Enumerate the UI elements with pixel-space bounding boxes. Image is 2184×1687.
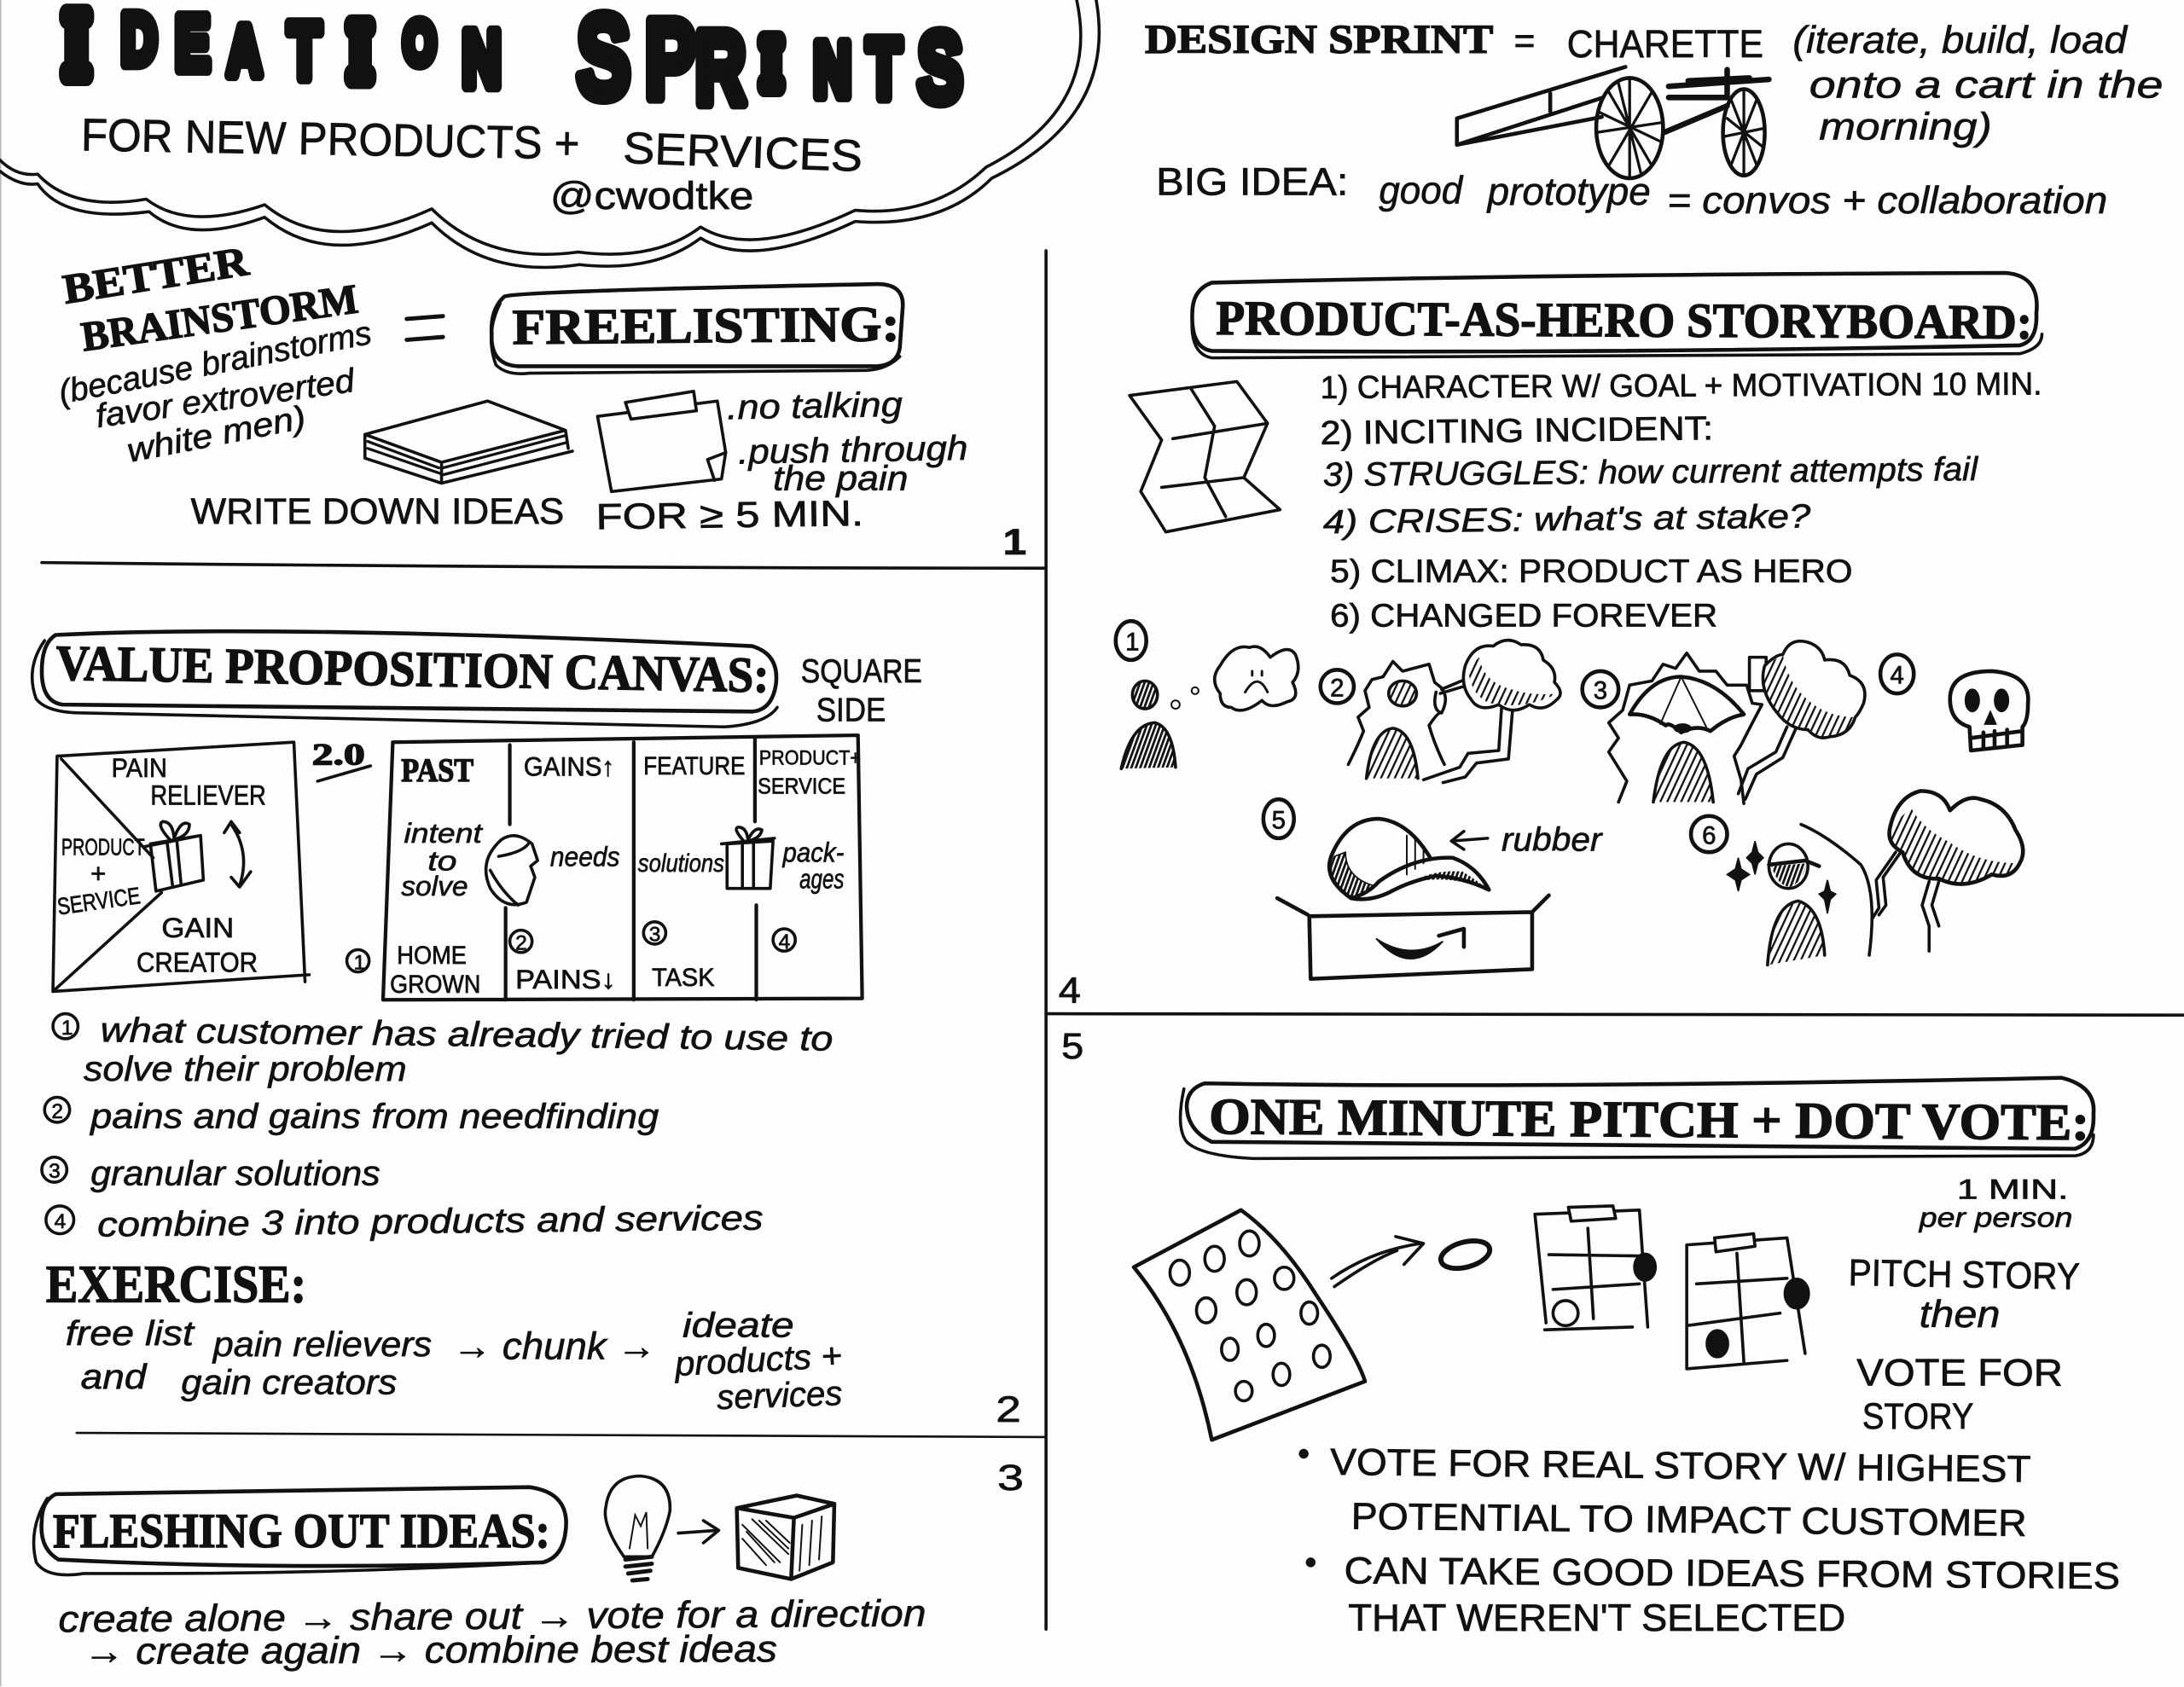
better brainstorm heading: favor extroverted (94, 362, 357, 435)
canvas notes: 2 (51, 1100, 63, 1123)
section numbers: 3 (997, 1458, 1024, 1498)
story panel 5: climax with cap in box (1263, 799, 1549, 979)
title: I (763, 26, 781, 101)
icon: customer head (486, 836, 537, 905)
canvas notes: solve their problem (84, 1049, 407, 1088)
value canvas square: PRODUCT (61, 833, 145, 860)
section numbers: 1 (1003, 522, 1026, 562)
story panel 6: changed forever (1691, 791, 2023, 965)
value canvas 2.0 grid: PAST (401, 752, 473, 789)
header cloud outline (0, 0, 1099, 267)
big idea (1156, 160, 2107, 222)
canvas notes: combine 3 into products and services (97, 1198, 764, 1244)
canvas notes: 4 (55, 1210, 66, 1233)
title: N (814, 27, 851, 113)
write down ideas caption: FOR ≥ 5 MIN. (595, 493, 863, 536)
voting notes: CAN TAKE GOOD IDEAS FROM STORIES (1344, 1550, 2120, 1597)
value canvas 2.0 grid: GAINS↑ (524, 751, 614, 781)
exercise steps: products + (672, 1336, 843, 1383)
icon: second storyboard with votes (1687, 1234, 1809, 1369)
value canvas 2.0 grid: ages (799, 863, 844, 895)
value canvas 2.0 grid: SERVICE (758, 774, 845, 799)
story panel 4: skull (1880, 654, 2028, 751)
value canvas 2.0 grid: to (427, 844, 457, 876)
freelisting tips: the pain (773, 459, 908, 498)
write down ideas caption (191, 491, 863, 536)
title: A (227, 13, 262, 90)
storyboard steps (1320, 366, 2042, 634)
value canvas 2.0 grid: intent (404, 817, 484, 849)
canvas notes (42, 1010, 834, 1244)
value canvas square: + (90, 859, 106, 889)
story panel 2: inciting incident: 2 (1330, 674, 1345, 702)
one minute per person: 1 MIN. (1957, 1174, 2068, 1205)
better brainstorm heading: white men) (124, 399, 309, 470)
freelisting tips: .no talking (727, 385, 903, 426)
value canvas square: SERVICE (55, 882, 142, 920)
value canvas 2.0 grid: GROWN (390, 971, 480, 999)
value canvas 2.0 grid: FEATURE (643, 752, 745, 780)
section numbers: 4 (1059, 971, 1081, 1011)
write down ideas caption: WRITE DOWN IDEAS (191, 491, 564, 531)
fleshing out steps: create alone → share out → vote for a direction (58, 1592, 926, 1640)
storyboard steps: 1) CHARACTER W/ GOAL + MOTIVATION 10 MIN. (1321, 366, 2042, 405)
title: R (695, 9, 746, 125)
icon: hatched cube (737, 1495, 834, 1579)
exercise steps: services (717, 1373, 843, 1417)
story panel 2: inciting incident (1321, 641, 1560, 783)
square side label (801, 653, 922, 729)
story panel 4: skull: 4 (1891, 662, 1904, 690)
square side label: SQUARE (801, 653, 922, 690)
pitch then vote (1848, 1252, 2080, 1436)
pitch then vote: PITCH STORY (1848, 1252, 2080, 1298)
heading: value proposition canvas (32, 631, 777, 727)
subtitle: SERVICES (622, 124, 863, 182)
heading: fleshing out ideas (34, 1487, 566, 1575)
story panel 6: changed forever: 6 (1702, 821, 1716, 849)
title: N (462, 14, 501, 103)
heading: fleshing out ideas: FLESHING OUT IDEAS: (53, 1504, 550, 1558)
title: S (918, 13, 962, 124)
heading: product-as-hero storyboard: PRODUCT-AS-HERO STORYBOARD: (1216, 292, 2032, 350)
exercise steps: gain creators (181, 1362, 397, 1401)
icon: double arrow (224, 821, 251, 887)
storyboard steps: 4) CRISES: what's at stake? (1323, 498, 1811, 541)
storyboard steps: 5) CLIMAX: PRODUCT AS HERO (1330, 553, 1852, 588)
design sprint definition: morning) (1819, 106, 1992, 148)
value canvas 2.0 grid (383, 735, 863, 1000)
big idea: = convos + collaboration (1667, 180, 2107, 222)
design sprint definition: = (1514, 20, 1535, 61)
value canvas square: GAIN (161, 912, 234, 943)
storyboard steps: 6) CHANGED FOREVER (1330, 598, 1717, 634)
canvas notes: granular solutions (90, 1153, 380, 1192)
storyboard steps: 2) INCITING INCIDENT: (1320, 410, 1713, 452)
better brainstorm heading: (because brainstorms (55, 315, 375, 411)
title (64, 0, 962, 125)
section numbers: 2 (996, 1389, 1021, 1429)
section numbers: 5 (1061, 1026, 1083, 1066)
version label: 2.0 (312, 737, 365, 771)
icon: sticky note with tape (597, 391, 726, 491)
canvas notes: 1 (61, 1017, 73, 1040)
canvas notes: pains and gains from needfinding (89, 1096, 659, 1135)
title: D (121, 0, 157, 80)
design sprint definition: DESIGN SPRINT (1145, 18, 1493, 62)
exercise steps: and (81, 1357, 148, 1396)
pitch then vote: then (1920, 1294, 2000, 1336)
version label (312, 737, 370, 781)
exercise steps: ideate (682, 1305, 794, 1344)
storyboard steps: 3) STRUGGLES: how current attempts fail (1323, 451, 1979, 494)
icon: gift (722, 827, 775, 889)
pitch then vote: VOTE FOR (1856, 1353, 2063, 1394)
value canvas 2.0 grid: solve (401, 870, 468, 901)
story panel 1: character and goal (1116, 621, 1298, 768)
design sprint definition: (iterate, build, load (1792, 20, 2129, 61)
icon: stack of paper (365, 401, 572, 484)
icon: single dot sticker (1438, 1236, 1493, 1273)
voting notes (1299, 1441, 2120, 1639)
pitch then vote: STORY (1862, 1396, 1973, 1436)
story panel 3: struggles: 3 (1594, 677, 1607, 705)
one minute per person (1919, 1174, 2072, 1232)
exercise steps: free list (66, 1313, 195, 1353)
fleshing out steps (58, 1592, 926, 1673)
square side label: SIDE (816, 693, 886, 729)
voting notes: VOTE FOR REAL STORY W/ HIGHEST (1330, 1441, 2031, 1491)
freelisting tips (727, 385, 968, 498)
title: T (867, 21, 902, 115)
author handle: @cwodtke (550, 174, 753, 217)
heading: one minute pitch and dot vote: ONE MINUTE PITCH + DOT VOTE: (1209, 1088, 2089, 1151)
grid markers: 3 (649, 924, 660, 947)
value canvas 2.0 grid: PRODUCT+ (759, 746, 861, 769)
story panel 1: character and goal: 1 (1125, 628, 1140, 656)
title: T (288, 6, 321, 95)
design sprint definition: CHARETTE (1567, 22, 1763, 66)
value canvas 2.0 grid: pack- (782, 837, 844, 868)
grid markers (347, 922, 795, 974)
equals sign (407, 316, 443, 339)
better brainstorm heading (55, 237, 375, 470)
icon: cart (1457, 67, 1769, 178)
exercise steps (66, 1305, 843, 1417)
heading: product-as-hero storyboard (1192, 273, 2042, 358)
value canvas 2.0 grid: needs (550, 841, 620, 872)
value canvas square: RELIEVER (150, 780, 266, 811)
canvas notes: what customer has already tried to use to (100, 1010, 834, 1058)
one minute per person: per person (1919, 1201, 2072, 1232)
value canvas 2.0 grid: solutions (638, 849, 724, 878)
better brainstorm heading: BETTER (60, 237, 252, 313)
fleshing out steps: → create again → combine best ideas (84, 1628, 777, 1673)
story panel 5: climax with cap in box: 5 (1272, 806, 1286, 834)
story panel 3: struggles (1583, 641, 1865, 803)
title: P (645, 0, 695, 121)
arrow to dot (1332, 1237, 1424, 1287)
value canvas 2.0 grid: TASK (652, 964, 715, 992)
section numbers (996, 522, 1083, 1498)
arrow (678, 1521, 718, 1543)
exercise steps: pain relievers (212, 1325, 432, 1364)
big idea: good (1379, 168, 1464, 212)
icon: light bulb (605, 1476, 670, 1580)
grid markers: 4 (779, 930, 790, 954)
design sprint definition: onto a cart in the (1809, 64, 2164, 106)
big idea: BIG IDEA: (1156, 160, 1348, 204)
exercise heading: EXERCISE: (46, 1256, 306, 1314)
icon: sheet of dot stickers (1134, 1210, 1365, 1440)
value canvas 2.0 grid: PAINS↓ (515, 965, 616, 994)
freelisting tips: .push through (738, 428, 968, 472)
grid markers: 1 (354, 951, 365, 974)
subtitle: FOR NEW PRODUCTS + (80, 109, 580, 170)
heading: value proposition canvas: VALUE PROPOSITION CANVAS: (55, 635, 770, 703)
design sprint definition (1145, 18, 2164, 148)
heading: freelisting (491, 284, 903, 374)
subtitle (80, 109, 863, 182)
value canvas square: PAIN (112, 753, 167, 783)
icon: gift (145, 821, 203, 891)
value canvas square: CREATOR (136, 947, 258, 978)
rubber label: rubber (1502, 822, 1604, 859)
exercise steps: → chunk → (453, 1325, 656, 1367)
better brainstorm heading: BRAINSTORM (78, 275, 361, 360)
grid markers: 2 (515, 931, 527, 954)
title: I (350, 6, 371, 96)
icon: storyboard with votes (1535, 1206, 1656, 1330)
value canvas square (53, 742, 309, 991)
title: O (404, 9, 436, 78)
value canvas 2.0 grid: HOME (397, 942, 467, 970)
heading: freelisting: FREELISTING: (512, 296, 900, 355)
icon: folded storyboard paper (1130, 381, 1280, 532)
big idea: prototype (1486, 170, 1651, 213)
voting notes: THAT WEREN'T SELECTED (1348, 1597, 1845, 1639)
voting notes: POTENTIAL TO IMPACT CUSTOMER (1351, 1496, 2027, 1545)
title: E (175, 1, 210, 87)
canvas notes: 3 (49, 1160, 61, 1183)
